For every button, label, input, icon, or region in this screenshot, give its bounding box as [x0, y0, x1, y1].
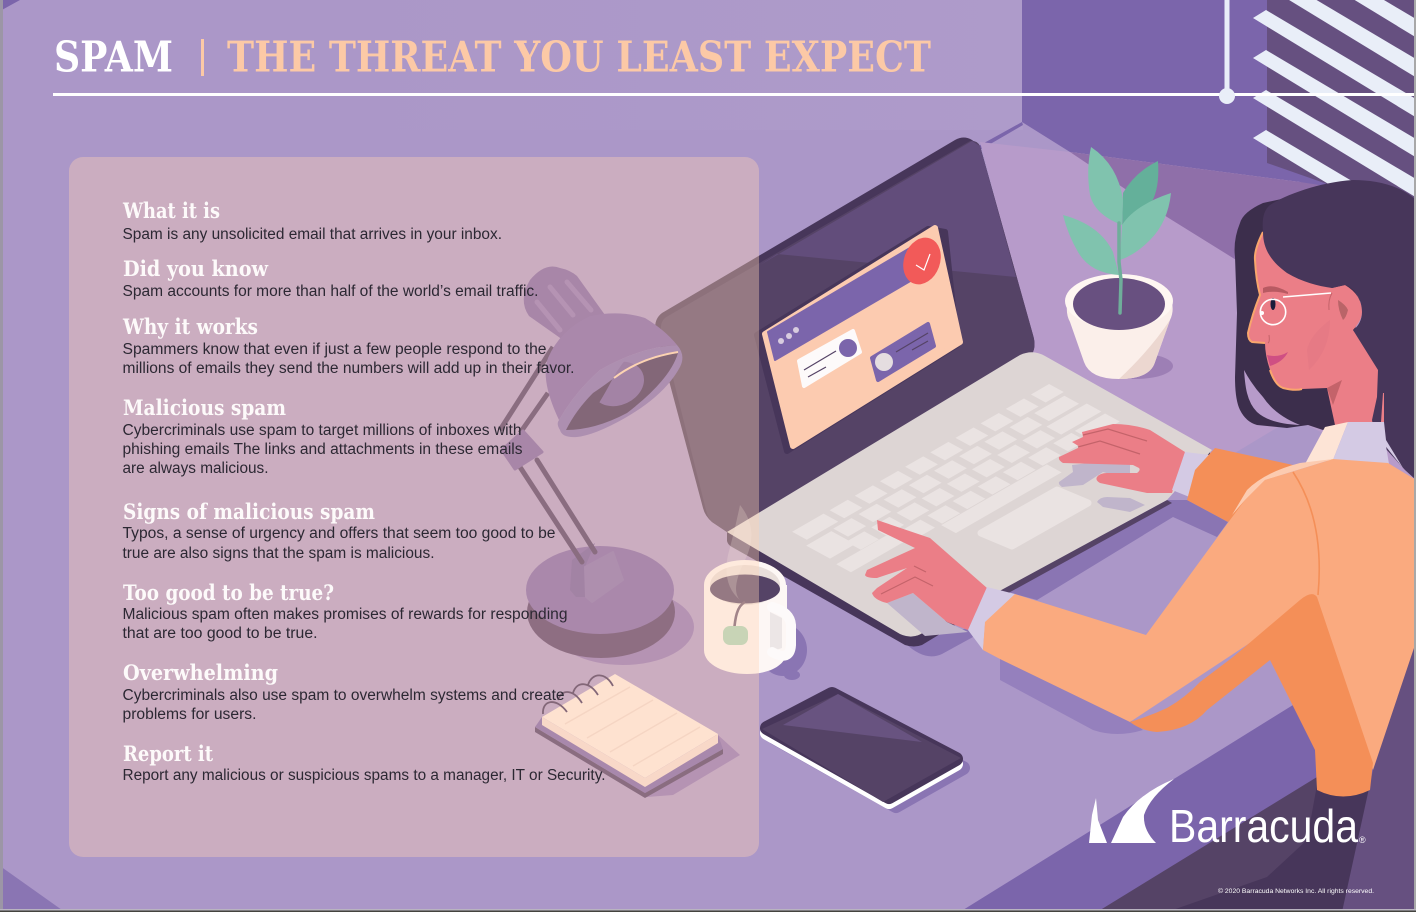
front hair: [1263, 180, 1416, 480]
title: SPAM: SPAM: [54, 32, 173, 82]
cheek blush: [1307, 320, 1330, 370]
section: report it: Report it: [123, 741, 213, 766]
section: too good to be true: that are too good to be true.: [122, 625, 318, 642]
section: did you know: Did you know: [123, 256, 269, 281]
neck and face: [1248, 232, 1384, 425]
panel text: [122, 198, 606, 784]
section: overwhelming: problems for users.: [122, 706, 256, 723]
section: malicious spam: phishing emails The links and attachments in these emails: [122, 441, 523, 458]
section: signs of malicious spam: true are also signs that the spam is malicious.: [122, 545, 434, 562]
trackpad: [981, 490, 1088, 546]
section: too good to be true: Too good to be true?: [123, 580, 334, 605]
section: malicious spam: [122, 395, 523, 477]
information panel: [69, 157, 759, 857]
section: what it is: [122, 198, 502, 243]
section: did you know: [122, 256, 538, 300]
desk lamp: [500, 266, 694, 665]
eyebrow, glasses, eye, lips, ear: [1263, 286, 1288, 294]
Barracuda logo: ®: [1359, 835, 1366, 845]
section: did you know: Spam accounts for more than half of the world’s email traffic.: [122, 283, 538, 300]
collar: [1305, 422, 1348, 464]
section: signs of malicious spam: Signs of malicious spam: [123, 499, 375, 524]
back hair: [1235, 195, 1360, 430]
section: too good to be true: Malicious spam often makes promises of rewards for responding: [122, 606, 568, 623]
laptop shadow: [905, 500, 1228, 656]
plant: [1063, 147, 1173, 379]
section: what it is: Spam is any unsolicited email that arrives in your inbox.: [122, 226, 502, 243]
section: overwhelming: Overwhelming: [123, 660, 278, 685]
tea mug: [704, 505, 807, 680]
section: overwhelming: [122, 660, 564, 723]
title: the threat you least expect: THE THREAT YOU LEAST EXPECT: [227, 32, 931, 82]
window blinds: [1253, 0, 1416, 240]
lower hand: [865, 520, 987, 636]
Barracuda logo: [1089, 779, 1366, 852]
section: signs of malicious spam: Typos, a sense of urgency and offers that seem too good to be: [122, 525, 556, 542]
sweater: [983, 459, 1416, 770]
section: signs of malicious spam: [122, 499, 556, 562]
section: why it works: [122, 314, 575, 377]
section: overwhelming: Cybercriminals also use spam to overwhelm systems and create: [122, 687, 564, 704]
keyboard: [785, 383, 1135, 583]
upper hand: [1059, 424, 1185, 512]
notebook: [535, 674, 740, 798]
section: why it works: Why it works: [122, 314, 258, 339]
section: what it is: What it is: [122, 198, 220, 223]
section: malicious spam: are always malicious.: [122, 460, 268, 477]
blind cord: [1224, 0, 1230, 96]
mug shadow: [759, 624, 807, 676]
laptop screen card: [757, 228, 960, 451]
tablet / phone: [762, 694, 963, 806]
woman: [865, 180, 1416, 796]
section: report it: [122, 741, 606, 784]
Barracuda logo: Barracuda: [1169, 800, 1358, 852]
section: report it: Report any malicious or suspicious spams to a manager, IT or Security.: [122, 767, 606, 784]
laptop base: [727, 450, 1210, 646]
section: why it works: Spammers know that even if just a few people respond to the: [122, 341, 546, 358]
laptop lid: [655, 138, 1034, 532]
copyright: © 2020 Barracuda Networks Inc. All rights reserved.: [1218, 887, 1374, 895]
header: [53, 32, 1414, 96]
section: why it works: millions of emails they send the numbers will add up in their favor.: [122, 360, 574, 377]
arm shadow: [1000, 659, 1143, 734]
section: malicious spam: Malicious spam: [123, 395, 286, 420]
section: malicious spam: Cybercriminals use spam to target millions of inboxes with: [122, 422, 522, 439]
laptop: [655, 138, 1228, 656]
section: too good to be true: [122, 580, 568, 642]
